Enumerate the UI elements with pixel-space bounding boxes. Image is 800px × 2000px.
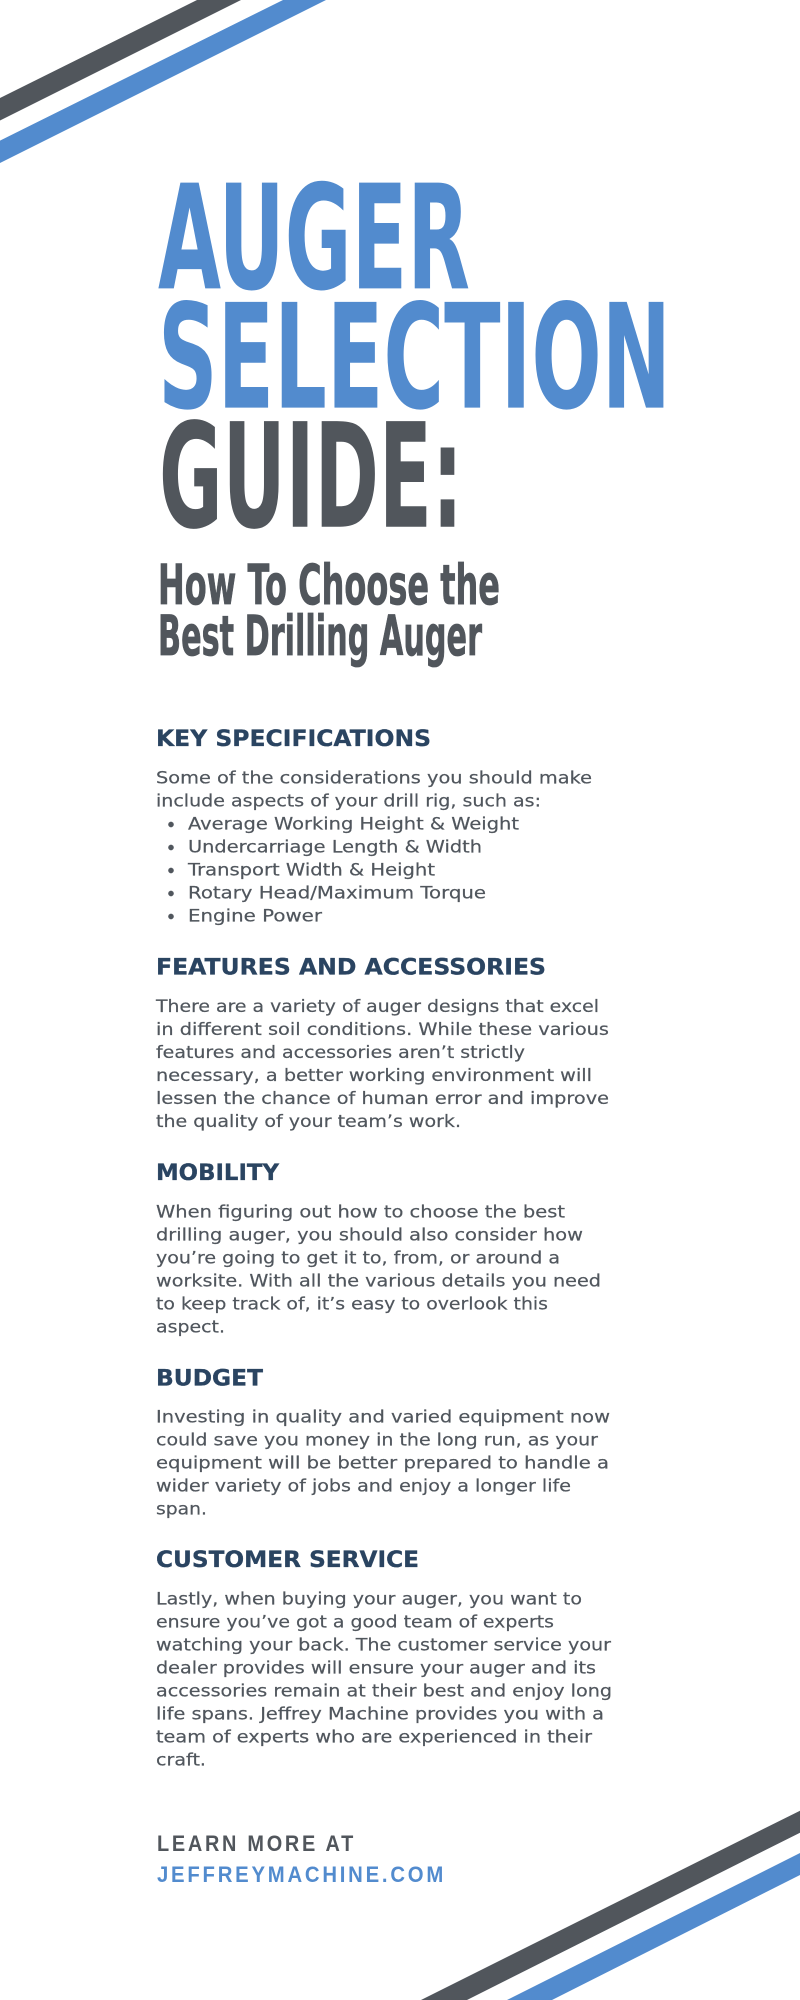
features text — [155, 997, 609, 1131]
mobility text: When figuring out how to choose the best — [156, 1202, 566, 1221]
mobility text: you’re going to get it to, from, or around a — [156, 1248, 560, 1267]
heading: features and accessories: FEATURES AND ACCESSORIES — [156, 954, 546, 980]
title: GUIDE: — [159, 393, 463, 562]
title — [158, 154, 671, 562]
budget text: span. — [156, 1500, 207, 1519]
mobility text: to keep track of, it’s easy to overlook this — [156, 1294, 548, 1313]
title: AUGER — [158, 154, 470, 323]
mobility text: worksite. With all the various details you need — [156, 1271, 601, 1290]
customer service text: dealer provides will ensure your auger and its — [156, 1659, 596, 1678]
customer service text: ensure you’ve got a good team of experts — [156, 1613, 554, 1632]
subtitle: Best Drilling Auger — [158, 604, 482, 668]
budget text: could save you money in the long run, as your — [156, 1431, 598, 1450]
customer service text: craft. — [156, 1751, 206, 1770]
intro text: include aspects of your drill rig, such as: — [156, 791, 541, 810]
subtitle — [158, 553, 500, 668]
customer service text: watching your back. The customer service your — [156, 1636, 611, 1655]
customer service text: accessories remain at their best and enjoy long — [156, 1682, 612, 1701]
intro text — [156, 768, 592, 810]
bottom-right diagonal stripes — [421, 1811, 800, 2000]
section: key specifications — [156, 726, 592, 925]
features text: There are a variety of auger designs that excel — [155, 997, 599, 1016]
heading: budget: BUDGET — [156, 1365, 264, 1391]
customer service text: Lastly, when buying your auger, you want to — [156, 1590, 582, 1609]
budget text: equipment will be better prepared to handle a — [156, 1454, 609, 1473]
top-left diagonal stripes — [0, 0, 326, 163]
bullet list: Rotary Head/Maximum Torque — [188, 883, 486, 902]
subtitle: How To Choose the — [158, 553, 500, 617]
bullet list — [168, 814, 520, 925]
features text: in different soil conditions. While these various — [156, 1020, 609, 1039]
heading: key specifications: KEY SPECIFICATIONS — [156, 726, 431, 752]
footer call to action: LEARN MORE AT — [157, 1831, 356, 1856]
bullet list: Transport Width & Height — [187, 860, 436, 879]
section: mobility — [156, 1160, 601, 1336]
bullet list: Undercarriage Length & Width — [188, 837, 482, 856]
mobility text: drilling auger, you should also consider how — [156, 1225, 583, 1244]
features text: the quality of your team’s work. — [156, 1112, 461, 1131]
budget text: wider variety of jobs and enjoy a longer life — [156, 1477, 571, 1496]
mobility text — [156, 1202, 601, 1336]
intro text: Some of the considerations you should make — [156, 768, 592, 787]
section: features and accessories — [155, 954, 609, 1131]
bullet list: Engine Power — [188, 906, 322, 925]
customer service text: team of experts who are experienced in their — [156, 1728, 592, 1747]
footer call to action — [157, 1831, 446, 1887]
heading: customer service: CUSTOMER SERVICE — [156, 1547, 419, 1573]
heading: mobility: MOBILITY — [156, 1160, 280, 1186]
customer service text: life spans. Jeffrey Machine provides you with a — [156, 1705, 604, 1724]
features text: features and accessories aren’t strictly — [156, 1043, 525, 1062]
section: budget — [156, 1365, 610, 1519]
section: customer service — [156, 1547, 612, 1770]
features text: lessen the chance of human error and improve — [156, 1089, 609, 1108]
customer service text — [156, 1590, 612, 1770]
mobility text: aspect. — [156, 1317, 225, 1336]
bullet list: Average Working Height & Weight — [188, 814, 520, 833]
footer call to action: JEFFREYMACHINE.COM — [157, 1862, 446, 1887]
features text: necessary, a better working environment will — [156, 1066, 592, 1085]
budget text — [156, 1408, 610, 1519]
budget text: Investing in quality and varied equipment now — [156, 1408, 610, 1427]
